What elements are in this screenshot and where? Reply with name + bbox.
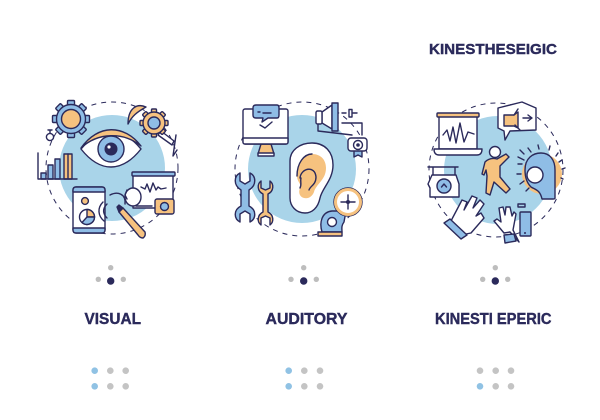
kinesthetic top dots	[480, 265, 510, 285]
icon: pen tool	[117, 205, 145, 238]
auditory dashed ring	[235, 102, 369, 236]
visual top dots	[96, 265, 126, 285]
panel: visual	[38, 100, 178, 238]
icon: small hand	[494, 207, 519, 243]
icon: left gear	[52, 100, 90, 138]
label: auditory: AUDITORY	[266, 311, 348, 328]
label: kinesthetic variant: KINESTI EPERIC	[435, 311, 552, 328]
icon: walking person	[482, 146, 510, 195]
icon: right gear with handle	[140, 109, 177, 156]
icon: tablet with pie chart	[73, 187, 105, 233]
icon: speech bubble with fist	[498, 102, 536, 140]
icon: speaker	[316, 103, 362, 135]
visual bottom dots	[91, 367, 129, 390]
icon: large glove	[444, 196, 484, 239]
kinesthetic dashed ring	[429, 103, 563, 237]
bar chart	[38, 153, 77, 179]
icon: compass on stand	[318, 188, 362, 236]
icon: small ring	[46, 130, 54, 141]
icon: presentation board	[125, 172, 175, 208]
icon: eye	[81, 130, 141, 167]
icon: orange crescent	[128, 106, 146, 124]
panel: auditory	[235, 102, 369, 236]
label: visual: VISUAL	[84, 311, 141, 328]
kinesthetic bottom dots	[477, 367, 514, 390]
icon: webcam	[348, 138, 367, 157]
kinesthetic background circle	[444, 116, 552, 224]
icon: phone	[518, 204, 531, 236]
icon: machine	[428, 167, 459, 197]
icon: laptop with pulse	[434, 113, 482, 155]
icon: blue wrench	[235, 173, 255, 222]
kinesthetic heading: KINESTHESEIGIC	[429, 41, 557, 58]
icon: ear	[290, 143, 333, 213]
icon: signal arcs	[99, 193, 125, 221]
icon: desktop monitor	[243, 105, 288, 156]
auditory background circle	[248, 115, 356, 223]
visual background circle	[59, 115, 165, 221]
icon: head with halo and rays	[517, 145, 565, 199]
icon: orange wrench	[258, 181, 273, 225]
panel: kinesthetic	[428, 41, 565, 243]
icon: orange camera	[155, 199, 174, 214]
auditory top dots	[288, 265, 319, 285]
auditory bottom dots	[285, 367, 323, 390]
visual dashed ring	[46, 102, 178, 234]
